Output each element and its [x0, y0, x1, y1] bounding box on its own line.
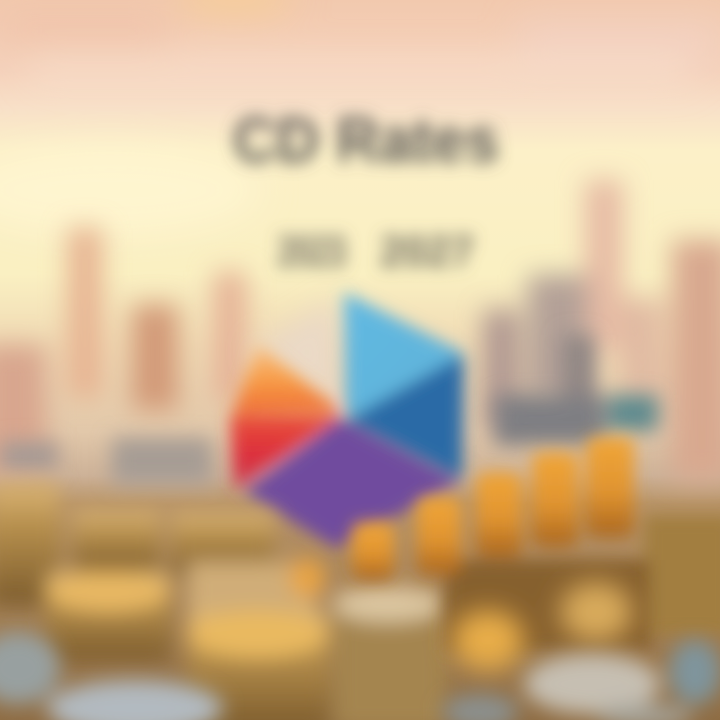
sky haze: [0, 0, 720, 234]
distant dark buildings: [0, 335, 658, 484]
hexagon pie chart: [230, 292, 464, 548]
coin stacks rising: [352, 437, 720, 650]
segment: orange: [232, 345, 342, 415]
pale wedge backdrop: [250, 300, 340, 412]
segment: purple: [244, 418, 460, 548]
gold drums foreground: [0, 482, 446, 720]
segment: red: [230, 416, 342, 490]
grey coins bottom: [0, 632, 720, 720]
subtitle: years: 2023: [278, 227, 346, 276]
segment: dark blue: [346, 354, 464, 480]
skyline: [0, 180, 720, 480]
subtitle: years: [278, 227, 474, 276]
title: CD Rates: [233, 104, 499, 176]
gold coin highlights: [452, 582, 632, 670]
segment: light blue: [344, 292, 462, 418]
subtitle: years: 2027: [380, 227, 474, 276]
